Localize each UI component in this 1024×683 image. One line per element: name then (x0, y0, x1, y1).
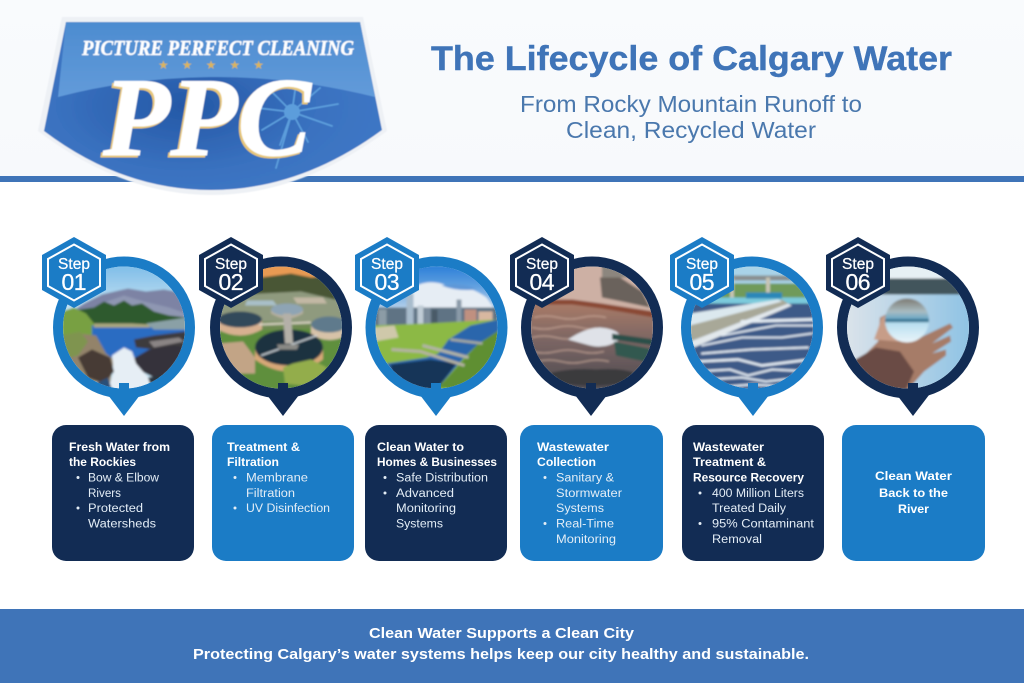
pointer (575, 383, 607, 416)
card: Treatment & Filtration: Treatment & (227, 442, 300, 454)
hexagon badge: Step 04: 04 (530, 269, 555, 295)
card: Wastewater Treatment & Resource Recovery: 400 Million Liters (712, 488, 804, 500)
card: Wastewater Collection: Stormwater (556, 488, 622, 500)
card: Wastewater Collection: Monitoring (556, 534, 616, 546)
logo: Picture Perfect Cleaning shield: PPC (102, 56, 312, 180)
photo: city skyline and river (374, 266, 498, 390)
card: Clean Water to Homes & Businesses: Monitoring (396, 503, 456, 515)
hexagon badge: Step 02 (199, 237, 263, 308)
card: Wastewater Collection: Sanitary & (556, 472, 614, 484)
card: Clean Water Back to the River: River (898, 504, 930, 516)
card: Wastewater Collection: Collection (537, 457, 596, 469)
card: Wastewater Treatment & Resource Recovery: Treatment & (693, 457, 766, 469)
card: Wastewater Treatment & Resource Recovery: Resource Recovery (693, 472, 805, 484)
card: Wastewater Treatment & Resource Recovery: Wastewater (693, 442, 765, 454)
card: Wastewater Collection: Real-Time (556, 518, 614, 530)
hexagon badge: Step 06: 06 (846, 269, 870, 295)
card: Fresh Water from the Rockies: the Rockies (69, 457, 136, 469)
step 01 marker (42, 237, 190, 416)
card: Wastewater Collection: Systems (556, 503, 604, 515)
card: Clean Water to Homes & Businesses: Systems (396, 518, 443, 530)
subtitle (520, 91, 862, 143)
card: Fresh Water from the Rockies: Watersheds (88, 518, 156, 530)
hexagon badge: Step 01: Step (58, 256, 90, 273)
hexagon badge: Step 02: Step (215, 256, 247, 273)
hexagon badge: Step 06 (826, 237, 890, 308)
step 04 marker (510, 237, 658, 416)
hexagon badge: Step 03 (355, 237, 419, 308)
card: Clean Water Back to the River (842, 425, 985, 561)
subtitle: From Rocky Mountain Runoff to (520, 91, 862, 117)
card: Wastewater Treatment & Resource Recovery (682, 425, 824, 561)
card: Clean Water to Homes & Businesses: Clean Water to (377, 442, 464, 454)
card: Clean Water Back to the River: Clean Water (875, 471, 953, 483)
pointer (420, 383, 452, 416)
logo: Picture Perfect Cleaning shield (38, 17, 387, 195)
pointer (897, 383, 929, 416)
step 02 marker (199, 237, 349, 416)
card: Fresh Water from the Rockies: Fresh Water from (69, 442, 170, 454)
subtitle: Clean, Recycled Water (566, 117, 816, 143)
hexagon badge: Step 06: Step (842, 256, 874, 273)
card: Treatment & Filtration: Membrane (246, 472, 308, 484)
card: Clean Water to Homes & Businesses (365, 425, 507, 561)
logo: Picture Perfect Cleaning shield: ★ ★ ★ ★ ★ (158, 58, 264, 72)
photo: wastewater outfall (530, 266, 654, 390)
hexagon badge: Step 03: Step (371, 256, 403, 273)
card: Treatment & Filtration: Filtration (246, 488, 295, 500)
card: Treatment & Filtration (212, 425, 354, 561)
card: Wastewater Treatment & Resource Recovery: Removal (712, 534, 762, 546)
card: Wastewater Treatment & Resource Recovery: Treated Daily (712, 503, 786, 515)
card: Clean Water to Homes & Businesses: Homes & Businesses (377, 457, 497, 469)
hexagon badge: Step 03: 03 (374, 269, 400, 295)
card: Fresh Water from the Rockies: Bow & Elbow (88, 472, 160, 484)
hexagon badge: Step 04 (510, 237, 574, 308)
card: Fresh Water from the Rockies (52, 425, 194, 561)
title: The Lifecycle of Calgary Water (431, 40, 952, 78)
card: Fresh Water from the Rockies: Rivers (88, 488, 121, 500)
hexagon badge: Step 05: Step (686, 256, 718, 273)
hexagon badge: Step 04: Step (526, 256, 558, 273)
photo: mountain river (62, 266, 186, 390)
pointer (267, 383, 299, 416)
photo: water treatment plant (218, 266, 349, 390)
step 03 marker (355, 237, 502, 416)
card: Clean Water to Homes & Businesses: Safe Distribution (396, 472, 488, 484)
logo: Picture Perfect Cleaning shield: PICTURE PERFECT CLEANING (81, 36, 354, 60)
hexagon badge: Step 01: 01 (62, 269, 86, 295)
card: Treatment & Filtration: Filtration (227, 457, 279, 469)
card: Wastewater Treatment & Resource Recovery: 95% Contaminant (712, 518, 815, 530)
hexagon badge: Step 05: 05 (690, 269, 714, 295)
step 05 marker (670, 237, 818, 416)
logo: Picture Perfect Cleaning shield: PPC (100, 58, 310, 182)
header rule (0, 176, 1024, 182)
footer heading: Clean Water Supports a Clean City (369, 625, 635, 642)
card: Wastewater Collection (520, 425, 663, 561)
card: Fresh Water from the Rockies: Protected (88, 503, 143, 515)
step 06 marker (826, 237, 974, 416)
hexagon badge: Step 05 (670, 237, 734, 308)
photo: aeration basin (690, 266, 814, 390)
hexagon badge: Step 02: 02 (218, 269, 244, 295)
footer band (0, 609, 1024, 683)
card: Treatment & Filtration: UV Disinfection (246, 503, 330, 515)
card: Wastewater Collection: Wastewater (537, 442, 610, 454)
card: Clean Water to Homes & Businesses: Advanced (396, 488, 454, 500)
footer message: Protecting Calgary’s water systems helps keep our city healthy and sustainable. (193, 646, 809, 663)
pointer (108, 383, 140, 416)
hexagon badge: Step 01 (42, 237, 106, 308)
photo: hand holding crystal ball (846, 266, 970, 390)
pointer (737, 383, 769, 416)
header background (0, 0, 1024, 177)
card: Clean Water Back to the River: Back to the (879, 488, 948, 500)
